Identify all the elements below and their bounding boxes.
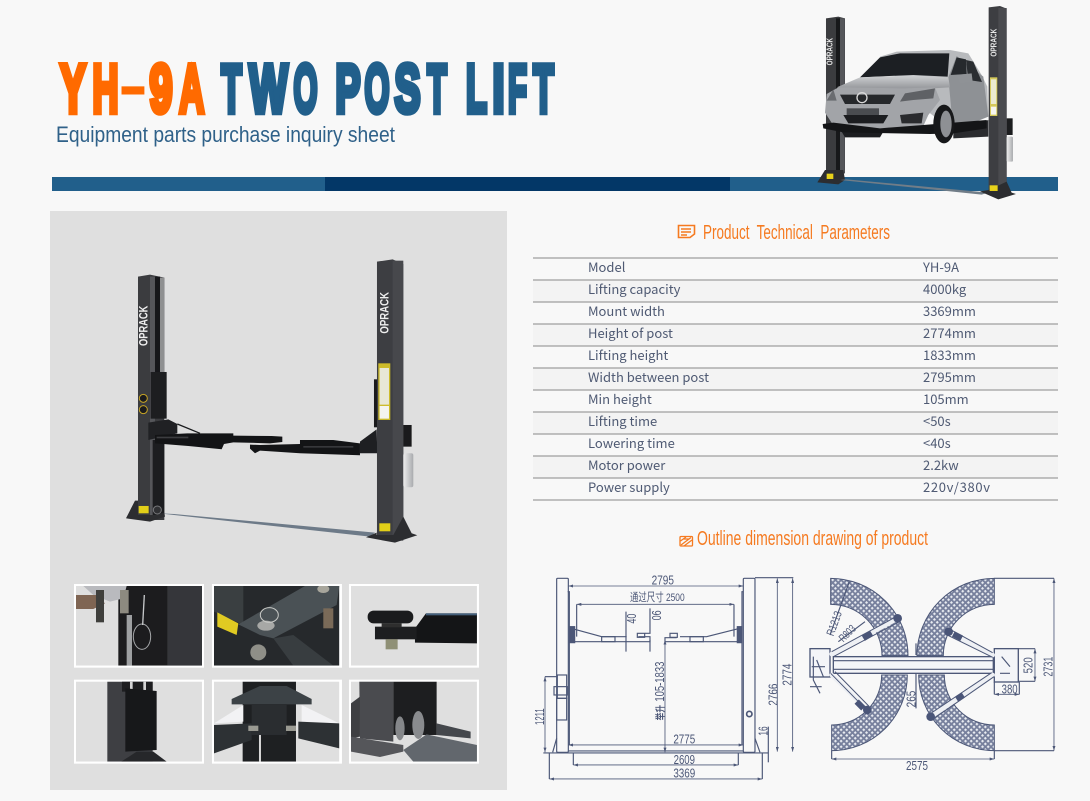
dimension labels: 2609 — [674, 752, 695, 767]
title: 9 — [150, 51, 172, 127]
thumbnail: carriage block — [74, 680, 204, 764]
right post — [366, 259, 417, 543]
dimension lines — [830, 578, 1054, 759]
left arm — [148, 419, 282, 449]
dimension labels: 520 — [1021, 657, 1036, 673]
table: technical parameters: 4000kg — [923, 279, 967, 298]
dimension labels: 2795 — [652, 572, 674, 587]
dimension labels — [532, 572, 794, 780]
dimension labels: 2775 — [673, 732, 695, 747]
right post: OPRACK — [377, 292, 391, 334]
thumbnail: lock pin — [212, 584, 342, 668]
table: technical parameters: 2795mm — [923, 367, 976, 386]
left post: OPRACK — [826, 38, 835, 65]
left post: OPRACK — [137, 305, 151, 346]
table: technical parameters: Width between post — [588, 367, 709, 386]
text: T — [533, 51, 554, 127]
title: W — [249, 51, 288, 127]
table: technical parameters: 1833mm — [923, 345, 976, 364]
title — [60, 47, 554, 127]
floor plate — [158, 513, 375, 537]
arms — [570, 627, 742, 643]
chart: top view drawing — [810, 578, 1055, 773]
title: O — [364, 51, 390, 127]
thumbnail: cable loop — [74, 584, 204, 668]
table: technical parameters: Height of post — [588, 323, 673, 342]
chart: front elevation drawing — [532, 572, 794, 780]
title: F — [508, 51, 527, 127]
heading: product technical parameters: Product Technical Parameters — [703, 222, 890, 244]
car body — [823, 50, 988, 143]
table: technical parameters: YH-9A — [922, 257, 959, 276]
table: technical parameters: Power supply — [588, 477, 670, 496]
table: technical parameters — [533, 257, 1058, 500]
dimension labels: 16 — [755, 726, 770, 736]
thumbnail: base and floor plate — [349, 680, 479, 764]
dimension labels: R803 — [837, 623, 859, 645]
table: technical parameters: Motor power — [588, 455, 666, 474]
title: O — [294, 51, 318, 127]
heading: outline dimension drawing — [680, 528, 928, 550]
panel: product photos — [50, 211, 507, 790]
table: technical parameters: 105mm — [923, 389, 969, 408]
dimension labels: 3369 — [673, 765, 695, 780]
table: technical parameters: Lifting height — [588, 345, 668, 364]
table: technical parameters: Model — [588, 257, 626, 276]
table: technical parameters: <50s — [923, 411, 951, 430]
dimension labels: 105-1833 — [652, 662, 667, 702]
dimension labels: 380 — [1002, 681, 1018, 696]
table: technical parameters: Lifting time — [588, 411, 657, 430]
dimension labels: 40 — [624, 614, 639, 624]
dimension labels — [825, 610, 1055, 773]
dimension labels: 2774 — [779, 663, 794, 686]
table: technical parameters: Min height — [588, 389, 652, 408]
table: technical parameters: Mount width — [588, 301, 665, 320]
dimension labels: 2766 — [765, 684, 780, 706]
table: technical parameters: Lowering time — [588, 433, 675, 452]
title: P — [336, 51, 360, 127]
photo: two post lift — [126, 259, 417, 543]
title: T — [427, 51, 447, 127]
left post — [817, 17, 845, 184]
photo: car on lift — [817, 6, 1016, 199]
dimension labels: 通过尺寸 2500 — [630, 590, 685, 604]
table: technical parameters: 220v/380v — [923, 477, 990, 496]
table: technical parameters: 3369mm — [923, 301, 976, 320]
right post — [980, 6, 1016, 199]
dimension labels: 举升 — [654, 705, 667, 720]
dimension labels: R1213 — [825, 610, 845, 638]
title: S — [394, 51, 420, 127]
heading: outline dimension drawing: Outline dimension drawing of product — [697, 528, 928, 550]
posts — [543, 578, 793, 753]
table: technical parameters: <40s — [923, 433, 951, 452]
thumbnail: rubber pad — [349, 584, 479, 668]
icon: note — [678, 226, 694, 238]
title: H — [92, 51, 118, 127]
arm sweep areas — [831, 578, 994, 751]
thumbnail: carriage front — [212, 680, 342, 764]
icon: drawing — [680, 536, 692, 546]
header band — [52, 177, 1058, 191]
right arm — [250, 429, 377, 455]
table: technical parameters: 2.2kw — [923, 455, 959, 474]
table: technical parameters: 2774mm — [923, 323, 976, 342]
title: Y — [60, 51, 86, 127]
table: technical parameters: Lifting capacity — [588, 279, 681, 298]
detail thumbnails — [74, 584, 479, 764]
dimension labels: 1211 — [532, 708, 547, 725]
dimension lines — [545, 578, 793, 779]
beam and posts — [810, 649, 1018, 693]
title: I — [492, 51, 504, 127]
title: T — [221, 51, 242, 127]
title: L — [466, 51, 487, 127]
heading: product technical parameters — [678, 222, 890, 244]
subtitle: Equipment parts purchase inquiry sheet — [56, 122, 395, 147]
dimension labels: 90 — [649, 610, 664, 620]
swing arms — [832, 618, 993, 717]
title: A — [179, 51, 204, 127]
dimension labels: 2575 — [906, 758, 928, 773]
floor plate — [840, 179, 988, 195]
title: - — [118, 47, 148, 123]
right post: OPRACK — [990, 28, 999, 57]
dimension labels: 2731 — [1040, 657, 1055, 677]
left post — [126, 275, 167, 522]
dimension labels: 265 — [903, 691, 918, 707]
